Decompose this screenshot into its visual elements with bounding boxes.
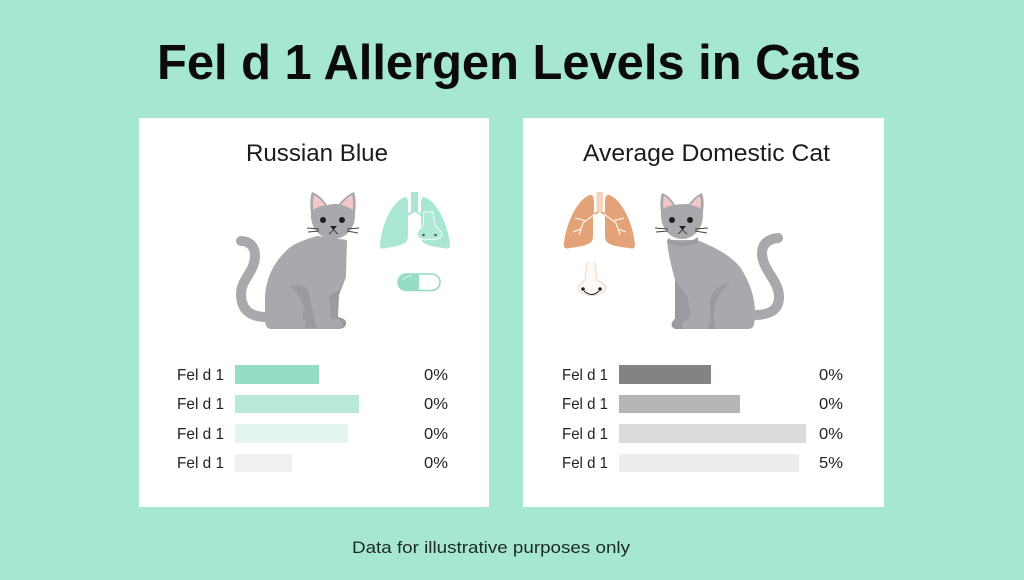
bar row 4: 5%: [819, 455, 843, 472]
bar row 2: 0%: [424, 396, 448, 413]
icon: mint lungs with nose: [380, 192, 450, 249]
bar row 3: [562, 424, 843, 443]
bar row 1: 0%: [819, 367, 843, 384]
panel: Average Domestic Cat: [523, 118, 884, 507]
bar row 1: [562, 365, 843, 384]
panel: Russian Blue: [139, 118, 489, 507]
bar row 3: Fel d 1: [177, 426, 224, 443]
bar row 2: [177, 395, 448, 413]
bar row 4: [177, 454, 448, 472]
icon: domestic cat: [655, 193, 779, 329]
bar row 4: Fel d 1: [177, 455, 224, 472]
bar row 1: Fel d 1: [562, 367, 608, 384]
bar row 3: 0%: [819, 426, 843, 443]
icon: orange lungs: [564, 192, 635, 249]
bar row 2: Fel d 1: [177, 396, 224, 413]
heading: Average Domestic Cat: Average Domestic Cat: [583, 140, 830, 167]
bar row 1: 0%: [424, 367, 448, 384]
footnote: Data for illustrative purposes only: [352, 538, 631, 557]
icon: nose: [578, 262, 606, 295]
title: Fel d 1 Allergen Levels in Cats: [157, 36, 861, 90]
icon: Russian Blue cat: [241, 192, 359, 329]
bar row 2: Fel d 1: [562, 396, 608, 413]
bar row 4: Fel d 1: [562, 455, 608, 472]
bar row 3: Fel d 1: [562, 426, 608, 443]
bar row 3: [177, 424, 448, 443]
heading: Russian Blue: Russian Blue: [246, 140, 388, 167]
bar row 4: [562, 454, 843, 472]
bar row 2: [562, 395, 843, 413]
bar row 1: [177, 365, 448, 384]
bar row 4: 0%: [424, 455, 448, 472]
bar row 3: 0%: [424, 426, 448, 443]
icon: capsule: [398, 274, 440, 290]
bar row 1: Fel d 1: [177, 367, 224, 384]
bar row 2: 0%: [819, 396, 843, 413]
